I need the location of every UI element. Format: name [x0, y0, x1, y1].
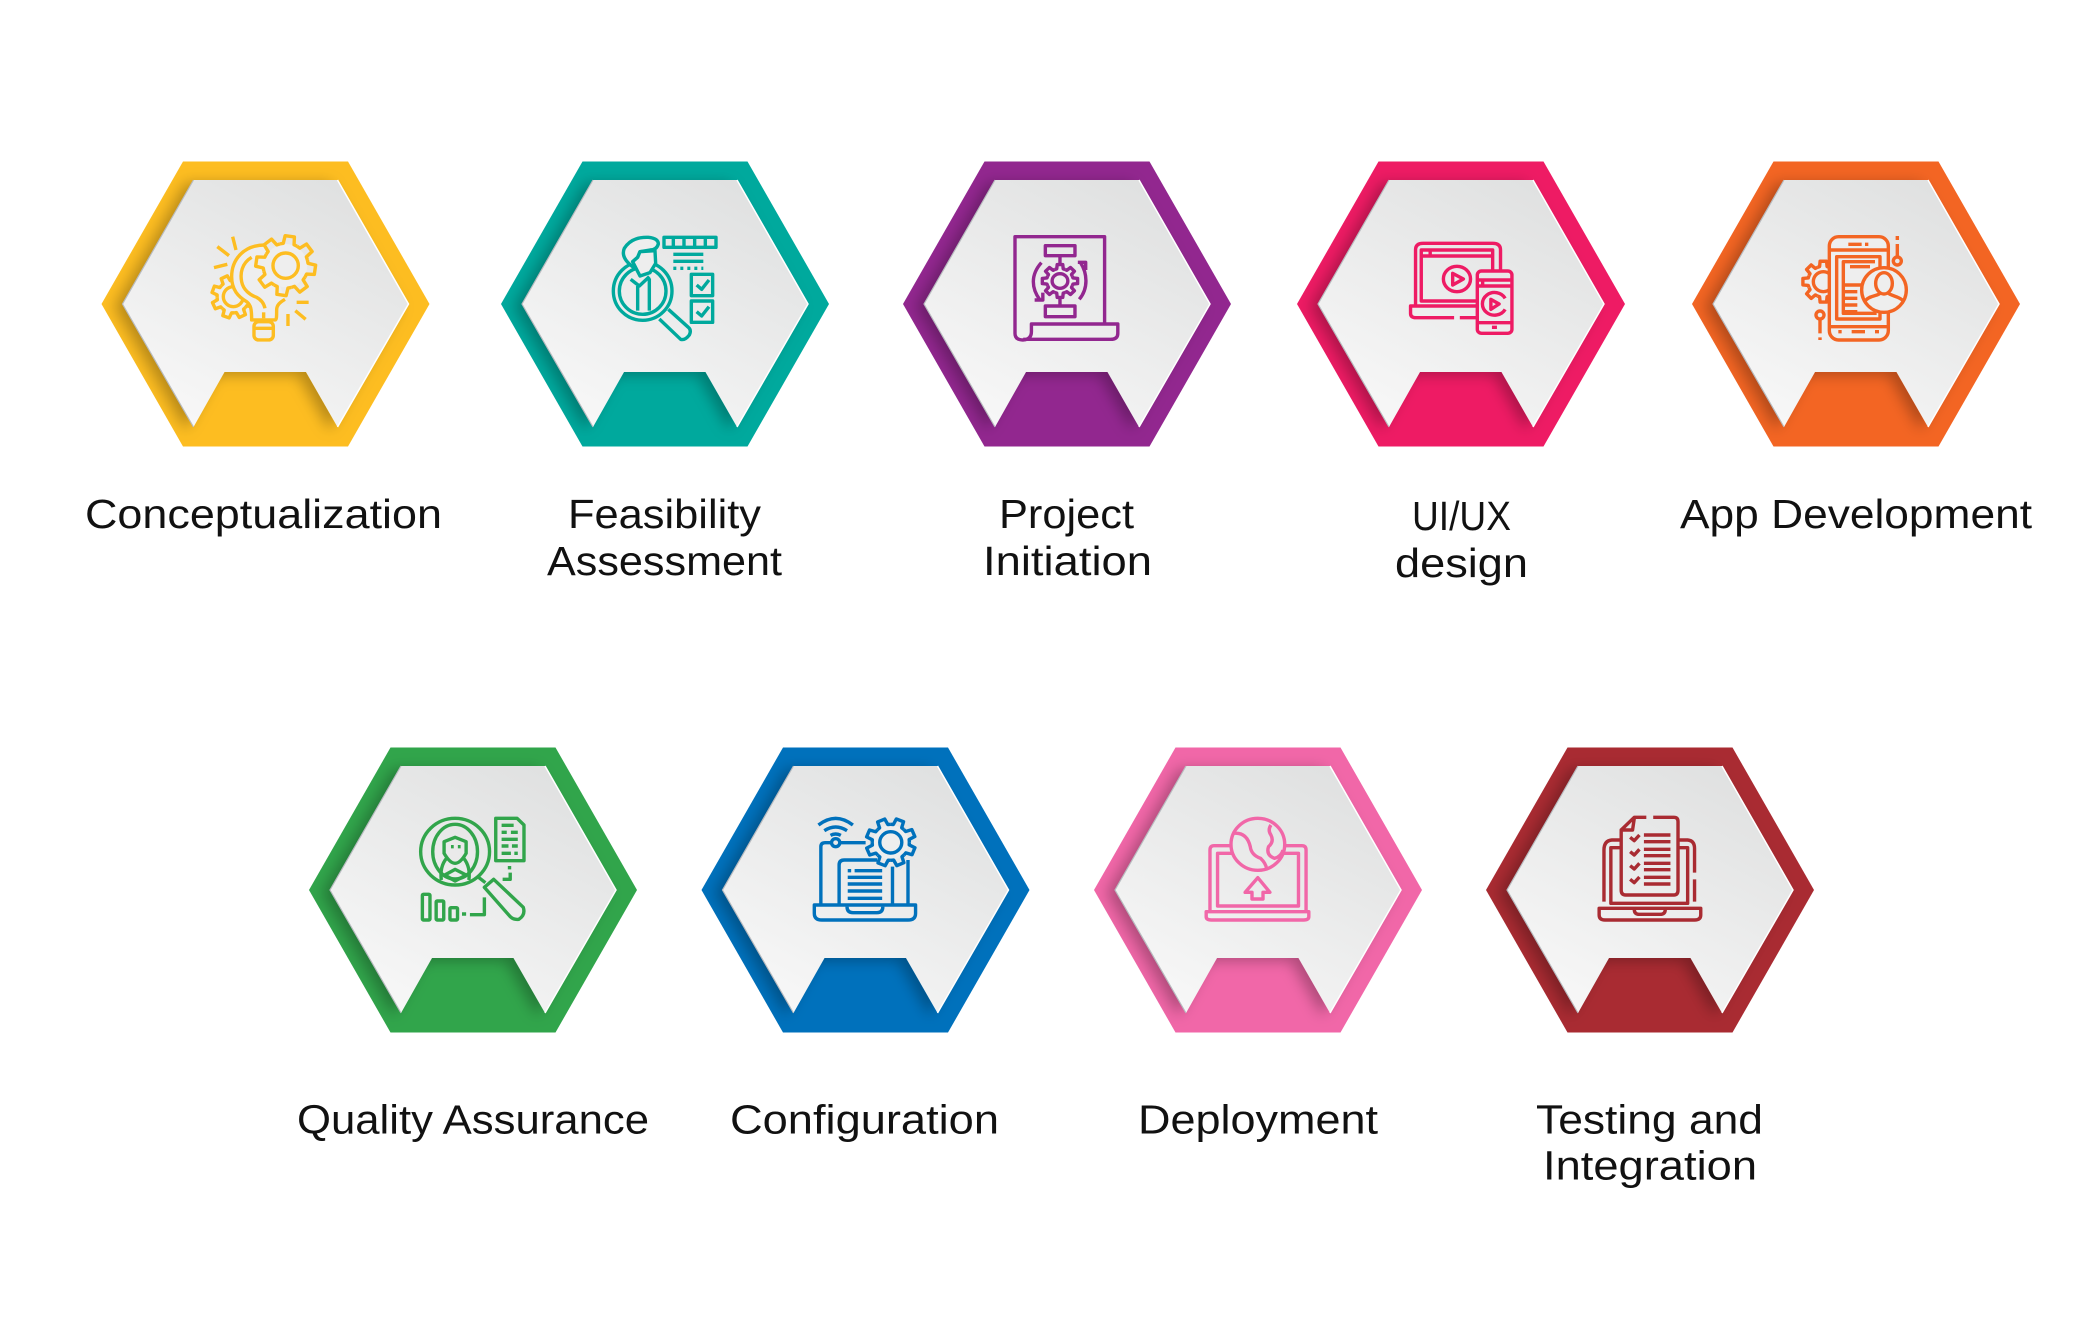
- icon: magnifier, person and checklist: [613, 237, 716, 340]
- label: Configuration: Configuration: [730, 1096, 999, 1142]
- label: Feasibility Assessment: [547, 491, 783, 584]
- hexagon: Project Initiation: [903, 162, 1231, 446]
- label: Quality Assurance: Quality Assurance: [297, 1096, 649, 1142]
- icon: magnifier over person with report: [421, 818, 524, 920]
- label: Project Initiation: Initiation: [983, 538, 1152, 584]
- hexagon: Conceptualization: [102, 162, 430, 446]
- label: UI/UX design: UI/UX: [1412, 493, 1511, 539]
- icon: phone, gear and user: [1803, 236, 1906, 340]
- hexagon: Feasibility Assessment: [501, 162, 829, 446]
- icon: blueprint with gear: [1015, 237, 1118, 340]
- hexagon: Deployment: [1094, 748, 1422, 1032]
- label: Testing and Integration: Integration: [1543, 1142, 1757, 1188]
- label: Testing and Integration: [1536, 1096, 1763, 1188]
- hexagon: Quality Assurance: [309, 748, 637, 1032]
- label: UI/UX design: [1395, 493, 1528, 586]
- icon: laptop and phone with play button: [1411, 243, 1512, 333]
- label: Project Initiation: Project: [999, 491, 1135, 537]
- label: App Development: App Development: [1680, 491, 2033, 537]
- label: Conceptualization: Conceptualization: [85, 491, 442, 537]
- label: Testing and Integration: Testing and: [1536, 1096, 1763, 1142]
- hexagon: Configuration: [702, 748, 1030, 1032]
- icon: laptop with globe and upload arrow: [1206, 818, 1309, 920]
- hexagon: App Development: [1692, 162, 2020, 446]
- label: Feasibility Assessment: Feasibility: [568, 491, 762, 537]
- icon: light bulb with gears: [206, 232, 319, 340]
- label: UI/UX design: design: [1395, 540, 1528, 586]
- label: Deployment: Deployment: [1138, 1096, 1379, 1142]
- hexagon: UI/UX design: [1297, 162, 1625, 446]
- label: Project Initiation: [983, 491, 1152, 584]
- label: Feasibility Assessment: Assessment: [547, 538, 783, 584]
- icon: laptop with checklist document: [1599, 817, 1701, 920]
- icon: laptop with gear and wifi: [814, 811, 923, 920]
- hexagon: Testing and Integration: [1486, 748, 1814, 1032]
